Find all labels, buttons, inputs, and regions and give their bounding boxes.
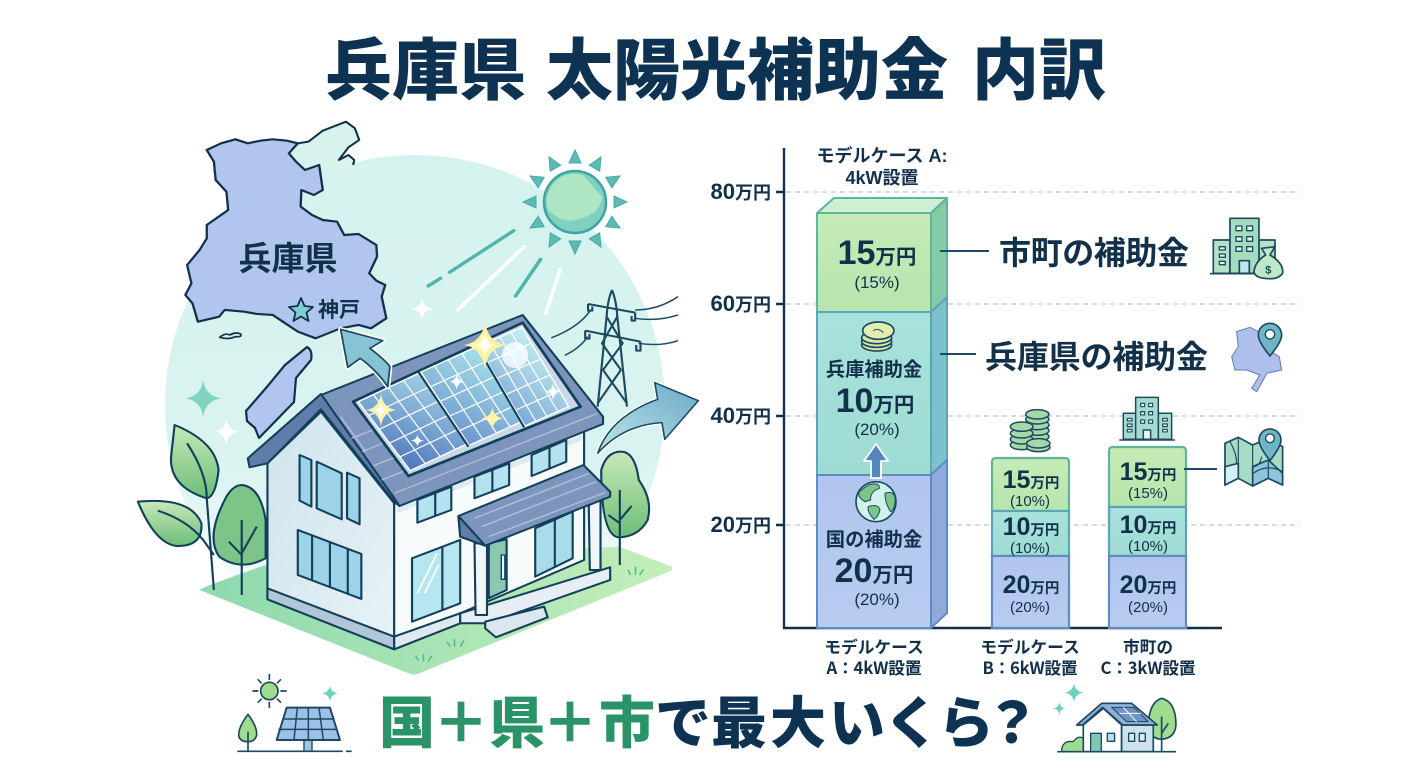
y axis labels: [711, 179, 771, 537]
icon: building: [1119, 397, 1175, 440]
panel 2: [421, 347, 524, 445]
bar A title: 4kW設置: [845, 168, 919, 188]
arrow: up: [864, 444, 888, 478]
arrow: house to grid: [598, 383, 698, 453]
bar B values: (10%): [1010, 540, 1050, 557]
bar A prefecture segment text: 10万円: [836, 382, 914, 420]
callout line: bar C: [1184, 468, 1217, 470]
gable windows: [298, 455, 361, 599]
bar B values: 10万円: [1003, 513, 1059, 541]
icon: coins: [862, 322, 894, 351]
ground: [200, 547, 672, 675]
bar C values: (10%): [1128, 538, 1168, 555]
house walls: [267, 412, 584, 649]
chart: stacked subsidy bars: [711, 145, 1300, 679]
right tree: [601, 452, 649, 565]
title: 太陽光補助金: [546, 17, 948, 114]
icon: solar panel with sun: [237, 674, 352, 751]
map: Awaji island: [246, 347, 312, 438]
left leaves and tree: [138, 425, 266, 595]
roof shingle lines: [341, 413, 598, 493]
icon: Hyogo map pin: [1232, 323, 1282, 392]
roof shadow on wall: [397, 435, 582, 513]
bar B values: (20%): [1010, 599, 1050, 616]
sun rays: [428, 231, 560, 313]
bar A national segment text: 国の補助金: [826, 524, 922, 552]
bar A city segment text: [838, 234, 916, 292]
bar A: [817, 198, 947, 628]
panel 1: [358, 373, 470, 471]
grass tufts: [416, 567, 643, 662]
main roof: [248, 315, 603, 506]
callout: city subsidy: 市町の補助金: [999, 228, 1189, 274]
bar A label: モデルケース: [824, 634, 924, 658]
title: 内訳: [972, 17, 1106, 114]
panel 3: [478, 327, 569, 426]
callout: prefecture subsidy: 兵庫県の補助金: [985, 332, 1208, 378]
bar C values: 10万円: [1120, 511, 1176, 539]
bar C label: [1100, 634, 1196, 679]
bottom headline: で最大いくら？: [655, 679, 1040, 760]
bar C label: 市町の: [1123, 634, 1173, 658]
title: 兵庫県: [325, 17, 526, 114]
bar A prefecture segment text: [826, 354, 922, 439]
sparkle: sky: [411, 298, 433, 320]
bar C values: (15%): [1128, 485, 1168, 502]
panel sun glare: [464, 321, 528, 369]
large window: [412, 540, 460, 622]
y axis labels: 60万円: [711, 291, 771, 316]
bar B label: B：6kW設置: [982, 655, 1078, 679]
map: Hyogo prefecture: [185, 139, 386, 338]
bar A label: A：4kW設置: [826, 655, 922, 679]
bar A city segment text: (15%): [854, 273, 900, 292]
bar B values: 20万円: [1003, 571, 1059, 599]
solar panel array: [353, 323, 581, 476]
icon: sun: [523, 150, 627, 254]
map label: Kobe star: [289, 294, 360, 324]
bar C values: 20万円: [1120, 571, 1176, 599]
sparkles on panels: [366, 374, 561, 447]
icon: folded map pin: [1225, 429, 1283, 486]
icon: power pylon: [551, 290, 678, 407]
upper side windows: [417, 440, 566, 523]
bar B label: モデルケース: [980, 634, 1080, 658]
bar B label: [980, 634, 1080, 679]
bar A prefecture segment text: 兵庫補助金: [826, 354, 922, 382]
axes: [776, 148, 1222, 628]
bar B values: [1003, 466, 1059, 616]
arrow: map to roof: [341, 329, 390, 387]
y axis labels: 80万円: [711, 179, 771, 204]
bar A title: モデルケース A:: [816, 145, 948, 166]
bar C values: (20%): [1128, 599, 1168, 616]
bar A label: [824, 634, 924, 679]
bar A city segment text: 15万円: [838, 234, 916, 272]
bar A title: [816, 145, 948, 188]
porch: [458, 465, 610, 637]
bottom headline: [379, 679, 1040, 760]
bar B values: (10%): [1010, 493, 1050, 510]
bar C values: 15万円: [1120, 458, 1176, 486]
icon: globe: [856, 482, 896, 522]
title: [325, 17, 1106, 114]
icon: city building with money bag: [1210, 218, 1283, 279]
icon: city building with money bag: $: [1265, 264, 1272, 276]
bar A national segment text: [826, 524, 922, 609]
bar C: [1109, 447, 1186, 628]
y axis labels: 20万円: [711, 512, 771, 537]
y axis labels: 40万円: [711, 403, 771, 428]
bar B: [992, 458, 1069, 628]
grid lines: [786, 192, 1300, 525]
bar C label: C：3kW設置: [1100, 655, 1196, 679]
illustration: house scene: [138, 315, 672, 675]
bottom headline: 国＋県＋市: [379, 679, 655, 760]
bar C values: [1120, 458, 1176, 616]
illustration: background circle: [165, 155, 665, 655]
bar A national segment text: (20%): [854, 590, 900, 609]
bar A prefecture segment text: (20%): [854, 420, 900, 439]
sparkles in sky: [185, 380, 239, 445]
bar A national segment text: 20万円: [835, 552, 913, 590]
map label: Hyogo: 兵庫県: [238, 232, 338, 280]
bar B values: 15万円: [1003, 466, 1059, 494]
map: sea north piece: [289, 122, 380, 210]
icon: coin stacks: [1010, 410, 1050, 452]
icon: house with solar roof: [1053, 683, 1176, 752]
map label: Kobe star: 神戸: [318, 294, 360, 324]
